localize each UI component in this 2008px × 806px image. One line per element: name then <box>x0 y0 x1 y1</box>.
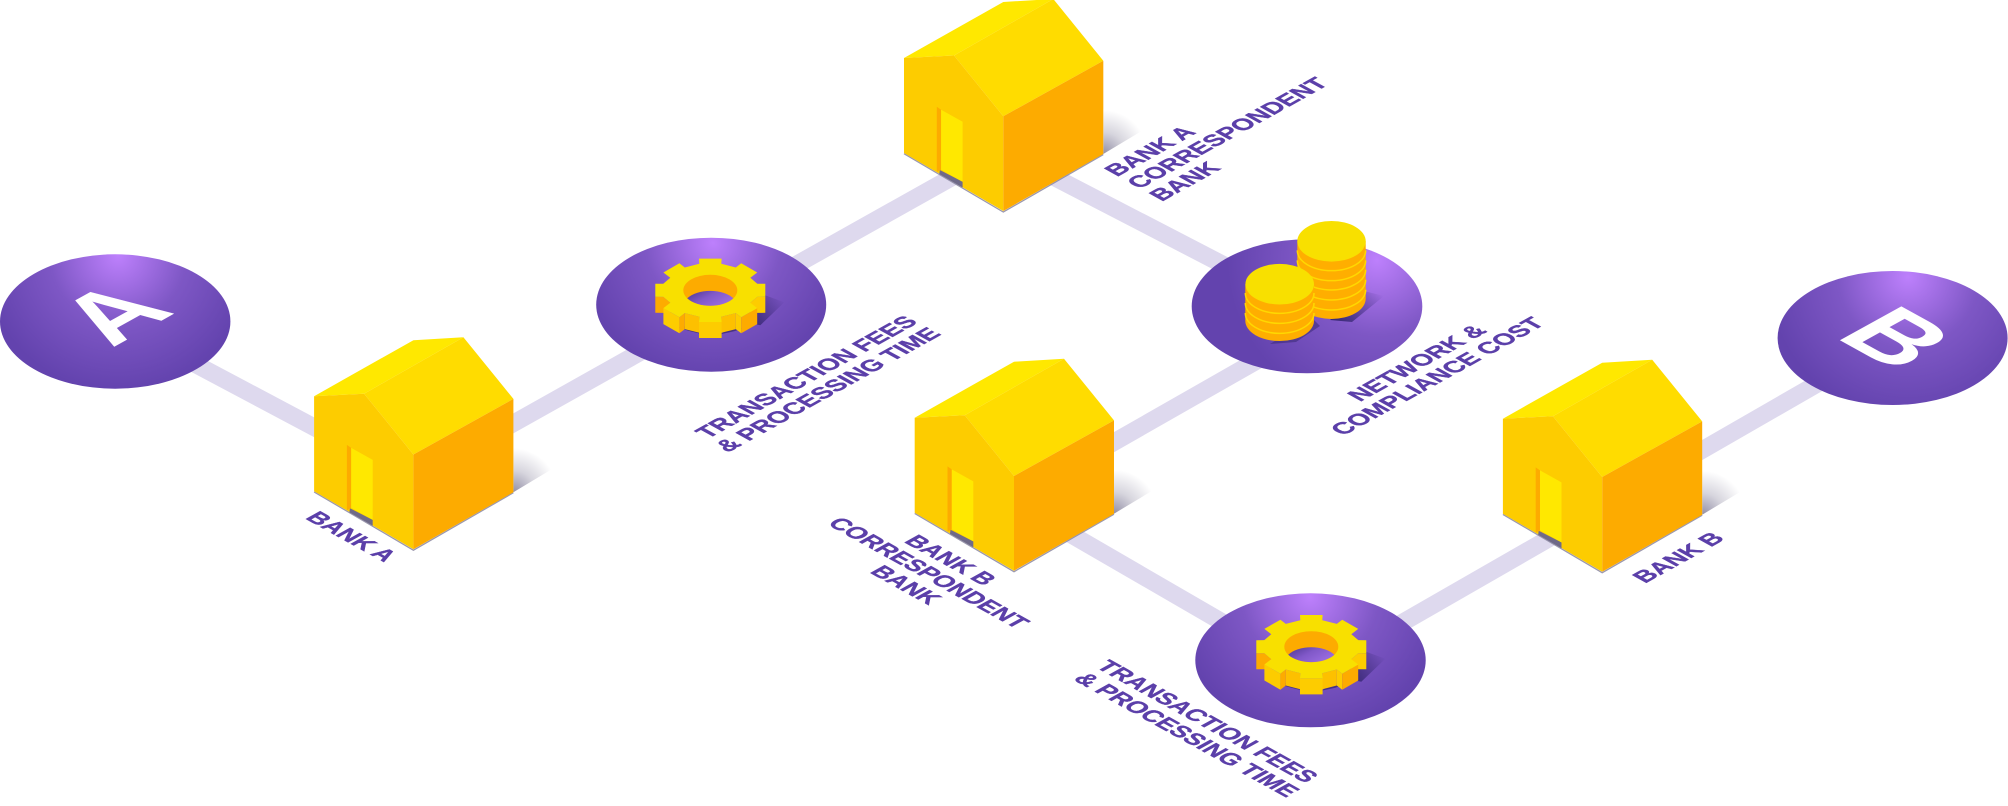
label: Bank B correspondent bank: CORRESPONDENT <box>821 514 1035 632</box>
connector: network cost to Bank B correspondent <box>1100 336 1300 450</box>
building: Bank B correspondent bank <box>915 359 1159 572</box>
icon: letter A: A <box>31 268 196 359</box>
node: circle A <box>0 254 230 389</box>
connector: Bank B correspondent to fees <box>1040 516 1260 644</box>
building: Bank A <box>314 337 558 550</box>
icon: front coin stack <box>1245 264 1314 341</box>
icon: letter B: B <box>1815 292 1979 383</box>
node: transaction fees gear <box>596 238 826 372</box>
building: Bank B <box>1503 360 1747 573</box>
icon: back coin stack <box>1297 221 1366 319</box>
connector: circle A to Bank A <box>115 322 340 441</box>
label: Bank B correspondent bank: BANK B <box>898 532 1001 589</box>
label: transaction fees and processing time: TRANSACTION FEES <box>690 313 924 442</box>
connector: Bank B to circle B <box>1650 341 1892 480</box>
label: transaction fees and processing time 2: & PROCESSING TIME <box>1067 670 1304 801</box>
connector: Bank A correspondent to network cost <box>1040 170 1300 304</box>
building: Bank A correspondent bank <box>904 0 1148 212</box>
label: Bank B: BANK B <box>1627 529 1731 587</box>
label: Bank A correspondent bank: BANK A <box>1099 123 1202 180</box>
label: Bank B correspondent bank: BANK <box>864 563 946 608</box>
label: network and compliance cost: COMPLIANCE COST <box>1326 314 1551 439</box>
label: Bank A correspondent bank: BANK <box>1144 159 1227 205</box>
icon: gear <box>1256 615 1385 694</box>
node: network and compliance cost coins <box>1192 221 1422 373</box>
node: circle B <box>1778 271 2008 405</box>
label: Bank A: BANK A <box>299 509 402 565</box>
node: transaction fees gear 2 <box>1195 593 1426 727</box>
label: transaction fees and processing time: & PROCESSING TIME <box>710 325 947 456</box>
label: Bank A correspondent bank: CORRESPONDENT <box>1122 74 1335 192</box>
shadow: coins <box>1330 290 1384 322</box>
label: network and compliance cost: NETWORK & <box>1342 322 1493 405</box>
label: transaction fees and processing time 2: TRANSACTION FEES <box>1090 657 1323 786</box>
connector: Bank A through fees to Bank A correspondent <box>490 176 955 436</box>
connector: fees to Bank B <box>1380 515 1590 636</box>
icon: gear <box>655 259 784 338</box>
